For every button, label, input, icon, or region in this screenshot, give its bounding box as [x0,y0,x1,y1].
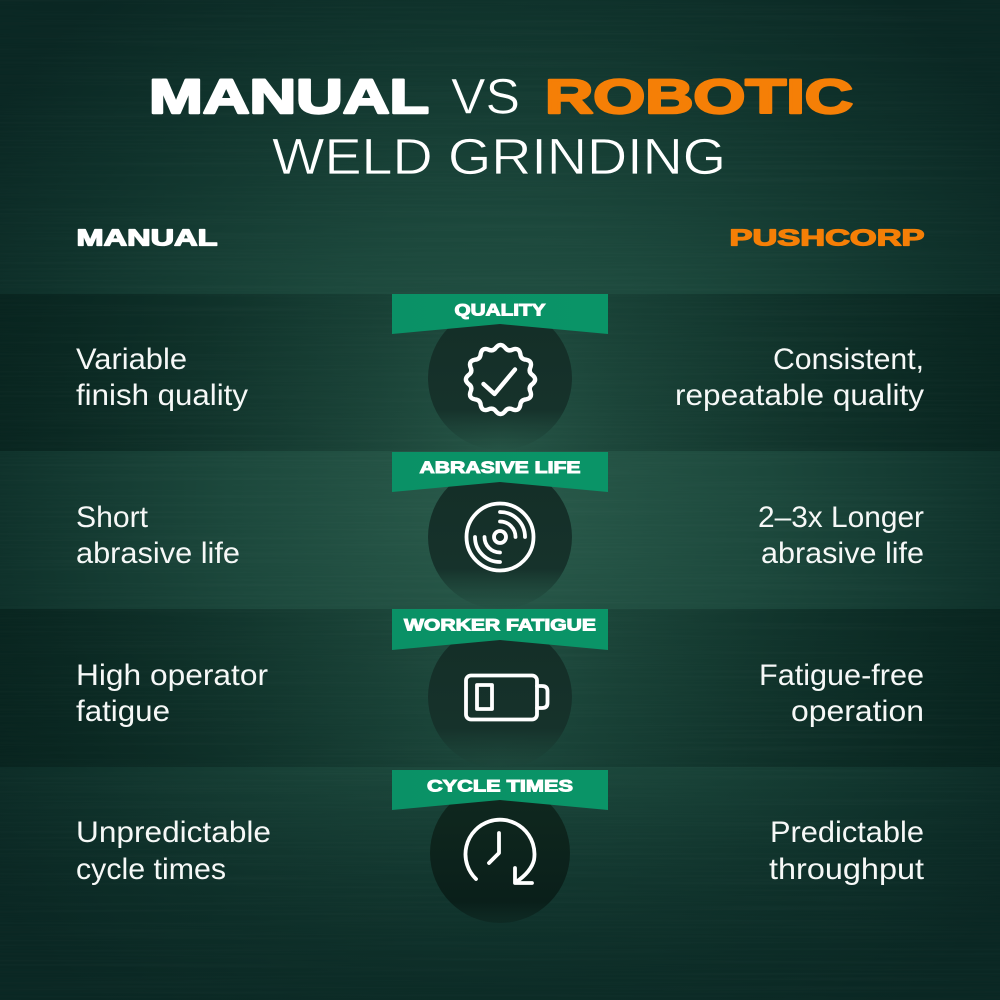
icon: badge with check [466,345,535,414]
manual text: cycle times: Unpredictable [76,816,271,849]
row: quality [76,294,924,450]
banner: cycle times: CYCLE TIMES [427,776,573,796]
icon circle: abrasive life [428,465,572,609]
row: abrasive life [76,452,924,609]
banner: quality: QUALITY [454,300,546,320]
banner: worker fatigue [392,609,608,650]
column heading: pushcorp: PUSHCORP [730,224,924,250]
manual text: worker fatigue: fatigue [76,695,170,728]
manual text: abrasive life: Short [76,501,149,534]
pushcorp text: quality: Consistent, [773,343,924,376]
icon circle: cycle times [430,783,570,923]
row: worker fatigue [76,609,924,769]
manual text: abrasive life: abrasive life [76,537,240,570]
pushcorp text: cycle times: throughput [769,853,925,886]
band: quality row [0,294,1000,451]
banner: worker fatigue: WORKER FATIGUE [404,616,596,634]
title [149,68,853,185]
manual text: quality: Variable [76,343,187,376]
title word: vs: VS [451,68,520,124]
pushcorp text: quality: repeatable quality [675,379,924,412]
pushcorp text: abrasive life: abrasive life [761,537,924,570]
title line two: WELD GRINDING [272,128,726,185]
icon circle: quality [428,306,572,450]
icon: abrasive disc [466,504,534,570]
bottom shade [0,770,1000,1000]
manual text: cycle times: cycle times [76,853,226,886]
banner: abrasive life [392,452,608,492]
title word: manual: MANUAL [149,71,429,124]
row: cycle times [76,770,925,923]
column heading: manual: MANUAL [76,224,218,250]
icon: low battery [466,676,548,720]
pushcorp text: worker fatigue: Fatigue-free [759,659,924,692]
banner: abrasive life: ABRASIVE LIFE [420,458,580,477]
banner: quality [392,294,608,334]
icon: clock with return arrow [465,820,534,883]
banner: cycle times [392,770,608,810]
pushcorp text: cycle times: Predictable [770,816,924,849]
pushcorp text: abrasive life: 2–3x Longer [758,501,924,534]
manual text: quality: finish quality [76,379,248,412]
manual text: worker fatigue: High operator [76,659,268,692]
icon circle: worker fatigue [428,625,572,769]
title word: robotic: ROBOTIC [545,71,853,124]
pushcorp text: worker fatigue: operation [791,695,924,728]
band: worker fatigue row [0,609,1000,767]
